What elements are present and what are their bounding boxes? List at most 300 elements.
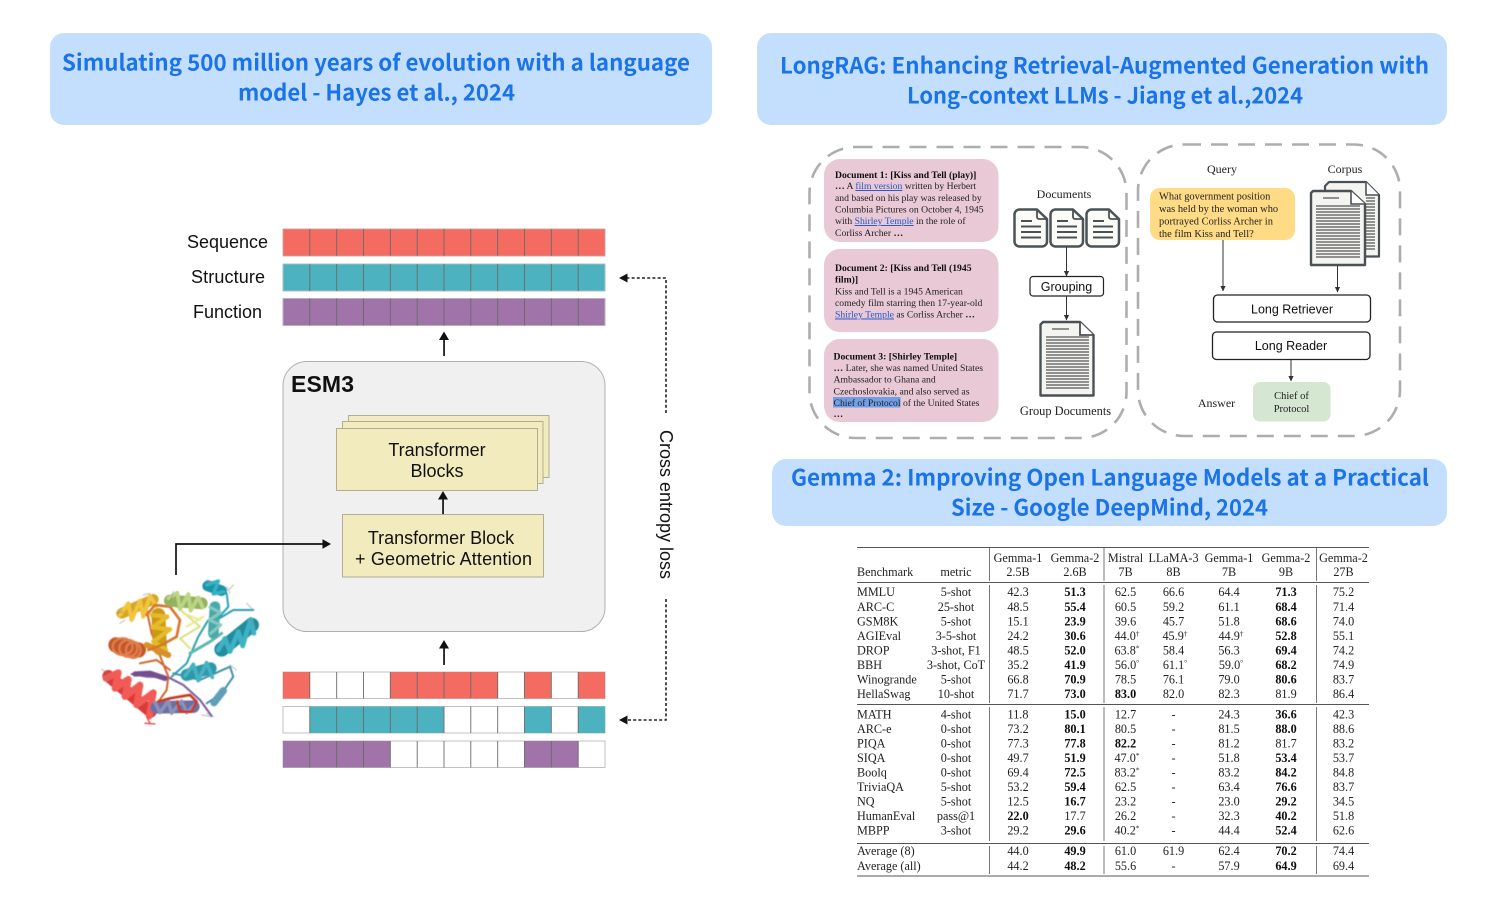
protein: dark red loop: [158, 695, 197, 712]
table group: 8 benchmarks: 73.0: [1064, 687, 1086, 701]
table group: 9 benchmarks: 81.5: [1218, 722, 1240, 736]
table averages: Average (8): [857, 844, 915, 858]
table group: 9 benchmarks: 63.4: [1218, 780, 1240, 794]
table group: 8 benchmarks: 59.2: [1163, 600, 1184, 614]
table group: 8 benchmarks: 10-shot: [938, 687, 975, 701]
table group: 8 benchmarks: [857, 585, 1354, 701]
table group: 8 benchmarks: 69.4: [1275, 644, 1297, 658]
table averages: 61.9: [1163, 844, 1184, 858]
table group: 8 benchmarks: 63.8: [1114, 644, 1136, 658]
title panel: LongRAG: LongRAG: Enhancing Retrieval-Augmented Generation with: [780, 48, 1429, 80]
table group: 9 benchmarks: 23.2: [1115, 794, 1136, 808]
title panel: Simulating 500 million years: [50, 33, 712, 125]
table group: 9 benchmarks: 40.2: [1114, 824, 1136, 838]
transformer blocks stack: [336, 416, 549, 490]
panel: long retrieval dashed frame: [1138, 144, 1400, 436]
table group: 9 benchmarks: 83.2: [1333, 736, 1354, 750]
title panel: Gemma 2: [772, 459, 1447, 526]
arrow: corpus to retriever: [1336, 266, 1338, 292]
table group: 8 benchmarks: 3-shot, F1: [931, 644, 981, 658]
table group: 8 benchmarks: †: [1184, 629, 1188, 638]
title panel: LongRAG: [757, 33, 1447, 125]
table group: 8 benchmarks: 71.7: [1007, 687, 1029, 701]
table group: 8 benchmarks: 71.4: [1333, 600, 1354, 614]
table averages: 44.2: [1007, 859, 1029, 873]
ESM3 architecture diagram: [176, 229, 676, 768]
title panel: Simulating 500 million years: model - Hayes et al., 2024: [238, 76, 515, 108]
table group: 8 benchmarks: ARC-C: [857, 600, 894, 614]
table vertical rules: [990, 548, 1316, 874]
transformer block with geometric attention: + Geometric Attention: [355, 549, 532, 569]
table group: 8 benchmarks: °: [1136, 658, 1139, 667]
table group: 9 benchmarks: 29.6: [1064, 824, 1086, 838]
table group: 8 benchmarks: †: [1240, 629, 1244, 638]
table group: 9 benchmarks: 15.0: [1064, 708, 1086, 722]
table group: 8 benchmarks: 74.2: [1333, 644, 1354, 658]
table group: 9 benchmarks: -: [1171, 780, 1176, 794]
table group: 8 benchmarks: 3-5-shot: [936, 629, 977, 643]
table header: 8B: [1166, 565, 1181, 579]
table group: 9 benchmarks: 0-shot: [941, 766, 972, 780]
table group: 8 benchmarks: 3-shot, CoT: [927, 658, 986, 672]
answer card: [1253, 382, 1330, 422]
long retriever box: [1214, 295, 1370, 322]
cross entropy label: Cross entropy loss: [656, 430, 676, 579]
icon: document 3: [1086, 210, 1119, 246]
table averages: Average (all): [857, 859, 921, 873]
table group: 9 benchmarks: 0-shot: [941, 751, 972, 765]
document card 3: Chief of Protocol of the United States: [834, 398, 980, 409]
table group: 8 benchmarks: 5-shot: [941, 614, 972, 628]
grouping box: Grouping: [1041, 280, 1092, 294]
input masked token bars: [283, 672, 605, 768]
grouping box: [1030, 276, 1104, 296]
table group: 9 benchmarks: 59.4: [1064, 780, 1086, 794]
table group: 9 benchmarks: 84.8: [1333, 766, 1354, 780]
table group: 8 benchmarks: 74.0: [1333, 614, 1354, 628]
output token bars: [283, 229, 605, 326]
table header: LLaMA-3: [1148, 551, 1199, 565]
arrow: query to retriever: [1222, 240, 1224, 291]
table group: 8 benchmarks: 23.9: [1064, 614, 1086, 628]
table group: 9 benchmarks: 51.9: [1064, 751, 1086, 765]
long retriever box: Long Retriever: [1251, 302, 1333, 316]
table group: 9 benchmarks: 80.5: [1115, 722, 1136, 736]
table group: 8 benchmarks: °: [1184, 658, 1187, 667]
title panel: Gemma 2: Gemma 2: Improving Open Language Models at a Practical: [791, 460, 1429, 492]
arrow: ESM3 to output: [439, 332, 449, 356]
table group: 9 benchmarks: pass@1: [937, 809, 975, 823]
table group: 9 benchmarks: 5-shot: [941, 794, 972, 808]
table group: 9 benchmarks: ARC-e: [857, 722, 892, 736]
table group: 9 benchmarks: 12.5: [1007, 794, 1029, 808]
table group: 9 benchmarks: 4-shot: [941, 708, 972, 722]
table group: 9 benchmarks: 36.6: [1275, 708, 1297, 722]
table header: 27B: [1333, 565, 1354, 579]
ESM3 box: [283, 362, 605, 632]
query card: [1150, 188, 1295, 240]
row labels: Function: [193, 302, 262, 322]
query label: Query: [1207, 162, 1237, 176]
table header: 2.6B: [1063, 565, 1087, 579]
cross entropy dashed arrows: [619, 274, 666, 724]
table group: 8 benchmarks: °: [1240, 658, 1243, 667]
table group: 9 benchmarks: 77.8: [1064, 736, 1086, 750]
table group: 8 benchmarks: 86.4: [1333, 687, 1354, 701]
table group: 8 benchmarks: AGIEval: [857, 629, 902, 643]
table group: 8 benchmarks: Winogrande: [857, 672, 917, 686]
protein: helix orange: [113, 638, 141, 658]
table group: 8 benchmarks: 45.7: [1163, 614, 1184, 628]
table header: 9B: [1279, 565, 1293, 579]
table group: 8 benchmarks: 68.4: [1275, 600, 1297, 614]
protein: thin chains: [132, 593, 253, 716]
arrow: grouping to group document: [1066, 296, 1068, 320]
table group: 9 benchmarks: 26.2: [1115, 809, 1136, 823]
answer card: Chief of: [1274, 391, 1309, 402]
table group: 8 benchmarks: 30.6: [1064, 629, 1086, 643]
document card 1: with Shirley Temple in the role of: [835, 216, 966, 227]
table group: 9 benchmarks: 42.3: [1333, 708, 1354, 722]
long reader box: [1212, 332, 1370, 360]
table header: Gemma-2: [1051, 551, 1099, 565]
arrow: documents to grouping: [1066, 247, 1068, 276]
protein: helix yellow centre: [147, 615, 170, 655]
arrow: protein to transformer block: [176, 539, 331, 575]
table group: 8 benchmarks: MMLU: [857, 585, 895, 599]
table group: 9 benchmarks: TriviaQA: [857, 780, 904, 794]
document card 1: Columbia Pictures on October 4, 1945: [835, 204, 984, 216]
table group: 9 benchmarks: 62.5: [1115, 780, 1136, 794]
document card 1: and based on his play was released by: [835, 193, 982, 204]
table averages: 49.9: [1064, 844, 1086, 858]
benchmark table: [857, 548, 1369, 876]
table header: Gemma-1: [994, 551, 1042, 565]
document card 1: [824, 159, 998, 242]
document card 3: …: [834, 409, 843, 420]
table group: 9 benchmarks: 52.4: [1275, 824, 1297, 838]
table group: 8 benchmarks: 24.2: [1007, 629, 1029, 643]
table group: 8 benchmarks: 66.6: [1163, 585, 1184, 599]
documents label: Documents: [1037, 187, 1092, 201]
table group: 8 benchmarks: 42.3: [1007, 585, 1029, 599]
document card 3: Document 3: [Shirley Temple]: [834, 352, 957, 362]
document card 2: comedy film starring then 17-year-old: [835, 298, 982, 309]
table group: 9 benchmarks: 82.2: [1115, 736, 1136, 750]
table group: 8 benchmarks: 79.0: [1218, 672, 1240, 686]
table group: 9 benchmarks: *: [1136, 751, 1140, 760]
table group: 8 benchmarks: 51.8: [1218, 614, 1240, 628]
document card 2: Kiss and Tell is a 1945 American: [835, 286, 963, 298]
transformer block with geometric attention: [342, 514, 544, 577]
protein: blue-grey coil: [214, 691, 223, 703]
table rules: [857, 548, 1369, 876]
table group: 9 benchmarks: NQ: [857, 794, 875, 808]
query card: was held by the woman who: [1159, 204, 1278, 215]
table group: 9 benchmarks: -: [1171, 722, 1176, 736]
table group: 9 benchmarks: 22.0: [1007, 809, 1029, 823]
table group: 9 benchmarks: 81.2: [1218, 736, 1240, 750]
query card: portrayed Corliss Archer in: [1159, 216, 1274, 228]
table group: 8 benchmarks: *: [1136, 644, 1140, 652]
table group: 9 benchmarks: HumanEval: [857, 809, 916, 823]
table header: Gemma-2: [1262, 551, 1310, 565]
table group: 8 benchmarks: 68.2: [1275, 658, 1297, 672]
icon: group document: [1040, 322, 1094, 396]
table group: 8 benchmarks: 55.4: [1064, 600, 1086, 614]
protein: helix teal right: [218, 619, 254, 652]
table group: 9 benchmarks: 51.8: [1333, 809, 1354, 823]
table group: 9 benchmarks: -: [1171, 708, 1176, 722]
table group: 9 benchmarks: 17.7: [1064, 809, 1086, 823]
title panel: LongRAG: Long-context LLMs - Jiang et al.,2024: [907, 78, 1303, 110]
table group: 9 benchmarks: MBPP: [857, 824, 890, 838]
table header: [857, 551, 1368, 579]
document card 3: [824, 339, 998, 422]
query card: the film Kiss and Tell?: [1159, 229, 1254, 240]
table group: 8 benchmarks: 52.0: [1064, 644, 1086, 658]
table averages: 62.4: [1218, 844, 1240, 858]
answer card: Protocol: [1274, 404, 1309, 415]
table group: 8 benchmarks: †: [1136, 629, 1140, 638]
table group: 8 benchmarks: 58.4: [1163, 644, 1184, 658]
document card 2: Shirley Temple as Corliss Archer …: [835, 310, 975, 320]
long reader box: Long Reader: [1255, 339, 1327, 353]
row labels: [187, 232, 268, 322]
table averages: [857, 844, 1354, 873]
table group: 9 benchmarks: -: [1171, 751, 1176, 765]
table group: 9 benchmarks: -: [1171, 766, 1176, 780]
document card 1: Corliss Archer …: [835, 228, 903, 239]
document card 1: Document 1: [Kiss and Tell (play)]: [835, 170, 976, 181]
table averages: 48.2: [1064, 859, 1086, 873]
protein: tail: [145, 717, 155, 724]
table group: 8 benchmarks: 61.1: [1218, 600, 1240, 614]
arrow: between blocks: [438, 491, 448, 515]
table group: 9 benchmarks: MATH: [857, 708, 892, 722]
table header: metric: [940, 565, 972, 579]
table group: 8 benchmarks: 48.5: [1007, 600, 1029, 614]
table group: 8 benchmarks: 70.9: [1064, 672, 1086, 686]
table group: 8 benchmarks: 48.5: [1007, 644, 1029, 658]
table group: 8 benchmarks: 35.2: [1007, 658, 1029, 672]
table group: 9 benchmarks: 83.2: [1218, 766, 1240, 780]
protein: helix blue grey: [155, 701, 195, 713]
protein: helix red: [106, 673, 153, 716]
table group: 8 benchmarks: 45.9: [1162, 629, 1184, 643]
table averages: 44.0: [1007, 844, 1029, 858]
table header: Benchmark: [857, 565, 914, 579]
table group: 8 benchmarks: 71.3: [1275, 585, 1297, 599]
table group: 9 benchmarks: 51.8: [1218, 751, 1240, 765]
table group: 8 benchmarks: 82.3: [1218, 687, 1240, 701]
answer label: Answer: [1198, 396, 1235, 410]
table group: 9 benchmarks: 47.0: [1114, 751, 1136, 765]
table group: 9 benchmarks: -: [1171, 736, 1176, 750]
table group: 8 benchmarks: 52.8: [1275, 629, 1297, 643]
table header: Gemma-1: [1205, 551, 1253, 565]
ESM3 label: ESM3: [291, 371, 354, 397]
table group: 9 benchmarks: 83.7: [1333, 780, 1354, 794]
table group: 8 benchmarks: 61.1: [1163, 658, 1184, 672]
table header: Mistral: [1108, 551, 1144, 565]
table group: 8 benchmarks: 75.2: [1333, 585, 1354, 599]
table group: 9 benchmarks: 72.5: [1064, 766, 1086, 780]
protein: helix teal lower: [185, 663, 212, 681]
table group: 9 benchmarks: 40.2: [1275, 809, 1297, 823]
corpus label: Corpus: [1328, 162, 1363, 176]
table group: 9 benchmarks: 88.0: [1275, 722, 1297, 736]
table group: 9 benchmarks: 83.2: [1114, 766, 1136, 780]
icon: corpus documents: [1311, 182, 1379, 265]
table group: 8 benchmarks: DROP: [857, 644, 890, 658]
row labels: Structure: [191, 267, 265, 287]
table group: 8 benchmarks: 15.1: [1007, 614, 1029, 628]
table group: 9 benchmarks: 24.3: [1218, 708, 1240, 722]
table group: 9 benchmarks: 16.7: [1064, 794, 1086, 808]
table group: 9 benchmarks: *: [1136, 766, 1140, 774]
table group: 8 benchmarks: 55.1: [1333, 629, 1354, 643]
table group: 9 benchmarks: Boolq: [857, 766, 887, 780]
table group: 9 benchmarks: PIQA: [857, 736, 886, 750]
table group: 8 benchmarks: GSM8K: [857, 614, 899, 628]
transformer block with geometric attention: Transformer Block: [368, 528, 515, 548]
table group: 8 benchmarks: 62.5: [1115, 585, 1136, 599]
table group: 9 benchmarks: SIQA: [857, 751, 886, 765]
table group: 8 benchmarks: 83.7: [1333, 672, 1354, 686]
table group: 9 benchmarks: 53.7: [1333, 751, 1354, 765]
table group: 8 benchmarks: 74.9: [1333, 658, 1354, 672]
icon: document 2: [1050, 210, 1083, 246]
document card 3: Ambassador to Ghana and: [834, 374, 936, 386]
table group: 9 benchmarks: 29.2: [1275, 794, 1297, 808]
arrow: reader to answer: [1290, 360, 1292, 381]
table group: 9 benchmarks: 5-shot: [941, 780, 972, 794]
table group: 8 benchmarks: 68.6: [1275, 614, 1297, 628]
table group: 9 benchmarks: 11.8: [1008, 708, 1028, 722]
protein: light teal helix: [209, 607, 221, 633]
table header: 7B: [1222, 565, 1236, 579]
LongRAG figure: [810, 144, 1400, 438]
table group: 9 benchmarks: 0-shot: [941, 736, 972, 750]
document card 3: … Later, she was named United States: [834, 363, 983, 374]
table group: 9 benchmarks: [857, 708, 1354, 838]
table group: 8 benchmarks: 59.0: [1219, 658, 1240, 672]
protein: helix green: [168, 593, 203, 611]
table group: 9 benchmarks: 44.4: [1218, 824, 1240, 838]
table group: 8 benchmarks: 83.0: [1115, 687, 1136, 701]
table group: 8 benchmarks: 56.3: [1218, 644, 1240, 658]
table group: 9 benchmarks: *: [1136, 824, 1140, 832]
table group: 8 benchmarks: 39.6: [1115, 614, 1136, 628]
document card 2: Document 2: [Kiss and Tell (1945: [835, 263, 972, 274]
table group: 8 benchmarks: 78.5: [1115, 672, 1136, 686]
table averages: 64.9: [1275, 859, 1297, 873]
table group: 8 benchmarks: 56.0: [1115, 658, 1136, 672]
table group: 9 benchmarks: 73.2: [1007, 722, 1029, 736]
table averages: 70.2: [1275, 844, 1297, 858]
table averages: 74.4: [1333, 844, 1354, 858]
document card 2: film)]: [835, 274, 858, 286]
table averages: 61.0: [1115, 844, 1136, 858]
query card: What government position: [1159, 192, 1271, 202]
table group: 9 benchmarks: 76.6: [1275, 780, 1297, 794]
table group: 8 benchmarks: 44.9: [1218, 629, 1240, 643]
table group: 8 benchmarks: HellaSwag: [857, 687, 910, 701]
panel: grouping dashed frame: [810, 147, 1126, 438]
transformer blocks stack: Blocks: [410, 461, 464, 481]
table group: 9 benchmarks: 88.6: [1333, 722, 1354, 736]
table group: 9 benchmarks: 29.2: [1007, 824, 1029, 838]
table group: 8 benchmarks: BBH: [857, 658, 882, 672]
table group: 8 benchmarks: 76.1: [1163, 672, 1184, 686]
table group: 9 benchmarks: 23.0: [1218, 794, 1240, 808]
protein: orange loop: [147, 605, 180, 650]
table group: 9 benchmarks: 84.2: [1275, 766, 1297, 780]
table header: 2.5B: [1006, 565, 1030, 579]
row labels: Sequence: [187, 232, 268, 252]
table group: 8 benchmarks: 60.5: [1115, 600, 1136, 614]
icon: protein structure: [102, 580, 255, 724]
table group: 9 benchmarks: 69.4: [1007, 766, 1029, 780]
document card 2: [824, 249, 998, 332]
transformer blocks stack: Transformer: [388, 440, 486, 460]
arrow: input to ESM3: [439, 640, 449, 665]
table group: 8 benchmarks: 5-shot: [941, 585, 972, 599]
table group: 9 benchmarks: 53.4: [1275, 751, 1297, 765]
table group: 9 benchmarks: 32.3: [1218, 809, 1240, 823]
table group: 9 benchmarks: 12.7: [1115, 708, 1136, 722]
title panel: Simulating 500 million years: Simulating 500 million years of evolution with a language: [62, 46, 690, 78]
table group: 9 benchmarks: 80.1: [1064, 722, 1086, 736]
table averages: 55.6: [1115, 859, 1136, 873]
table group: 9 benchmarks: -: [1171, 794, 1176, 808]
table group: 9 benchmarks: -: [1171, 824, 1176, 838]
table group: 9 benchmarks: 34.5: [1333, 794, 1354, 808]
table group: 9 benchmarks: -: [1171, 809, 1176, 823]
table group: 9 benchmarks: 81.7: [1275, 736, 1297, 750]
protein: helix yellow upper: [120, 596, 156, 620]
table group: 8 benchmarks: 25-shot: [938, 600, 975, 614]
table group: 8 benchmarks: 82.0: [1163, 687, 1184, 701]
table group: 9 benchmarks: 62.6: [1333, 824, 1354, 838]
table group: 8 benchmarks: 66.8: [1007, 672, 1029, 686]
table group: 9 benchmarks: 53.2: [1007, 780, 1029, 794]
group documents label: Group Documents: [1020, 404, 1111, 418]
table header: 7B: [1118, 565, 1133, 579]
document card 1: … A film version written by Herbert: [835, 181, 976, 192]
table group: 9 benchmarks: 49.7: [1007, 751, 1029, 765]
table group: 9 benchmarks: 3-shot: [941, 824, 972, 838]
protein: side chains: [102, 580, 255, 717]
table averages: -: [1171, 859, 1176, 873]
icon: document 1: [1014, 210, 1047, 246]
table averages: 57.9: [1218, 859, 1240, 873]
protein: helix teal top: [207, 581, 224, 594]
table group: 8 benchmarks: 5-shot: [941, 672, 972, 686]
table group: 9 benchmarks: 0-shot: [941, 722, 972, 736]
protein: purple sheet: [135, 673, 165, 678]
table group: 8 benchmarks: 51.3: [1064, 585, 1086, 599]
table group: 8 benchmarks: 41.9: [1064, 658, 1086, 672]
title panel: Gemma 2: Size - Google DeepMind, 2024: [951, 490, 1268, 522]
table group: 8 benchmarks: 44.0: [1114, 629, 1136, 643]
table averages: 69.4: [1333, 859, 1354, 873]
table group: 8 benchmarks: 64.4: [1218, 585, 1240, 599]
table group: 8 benchmarks: 80.6: [1275, 672, 1297, 686]
table header: Gemma-2: [1319, 551, 1368, 565]
table group: 8 benchmarks: 81.9: [1275, 687, 1297, 701]
